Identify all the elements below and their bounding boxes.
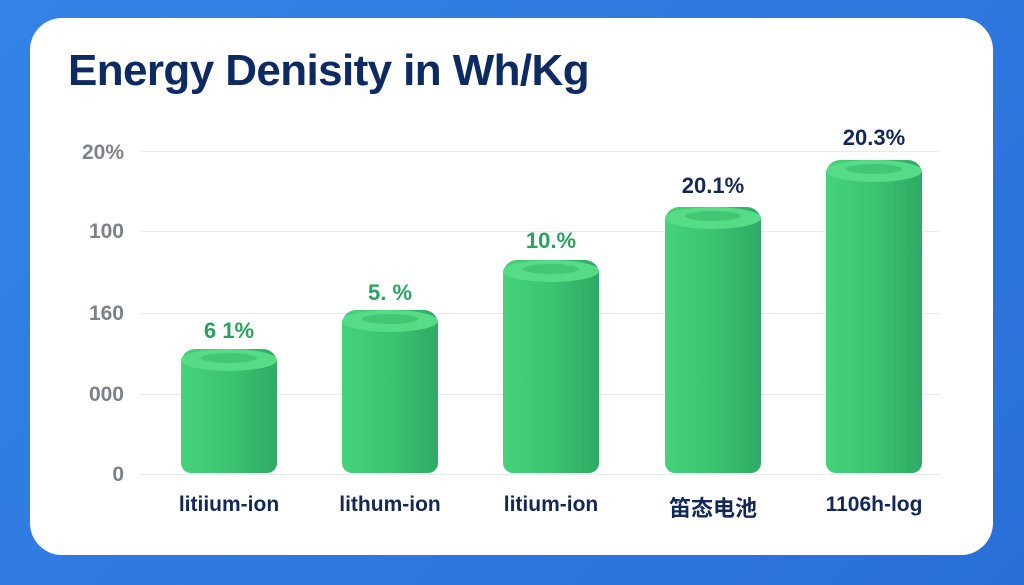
text: 160 — [89, 302, 124, 325]
y axis labels — [82, 141, 124, 486]
text: 0 — [112, 463, 124, 486]
value 4: 20.1% — [682, 173, 744, 198]
text: 100 — [89, 220, 124, 243]
bar 3 — [503, 260, 599, 473]
bar 4 — [665, 207, 761, 473]
bar 5 — [826, 160, 922, 473]
text: litium-ion — [504, 493, 598, 516]
value 2: 5. % — [368, 280, 412, 305]
bar 2 — [342, 310, 438, 473]
text: 000 — [89, 383, 124, 406]
text: 笛态电池 — [669, 496, 757, 521]
title: Energy Denisity in Wh/Kg — [68, 46, 589, 95]
bar 1 — [181, 349, 277, 473]
text: 20% — [82, 141, 124, 164]
value 3: 10.% — [526, 228, 576, 253]
text: lithum-ion — [339, 493, 441, 516]
value 5: 20.3% — [843, 125, 905, 150]
text: 1106h-log — [826, 493, 922, 516]
value 1: 6 1% — [204, 318, 254, 343]
category labels — [179, 493, 922, 521]
text: litiium-ion — [179, 493, 279, 516]
